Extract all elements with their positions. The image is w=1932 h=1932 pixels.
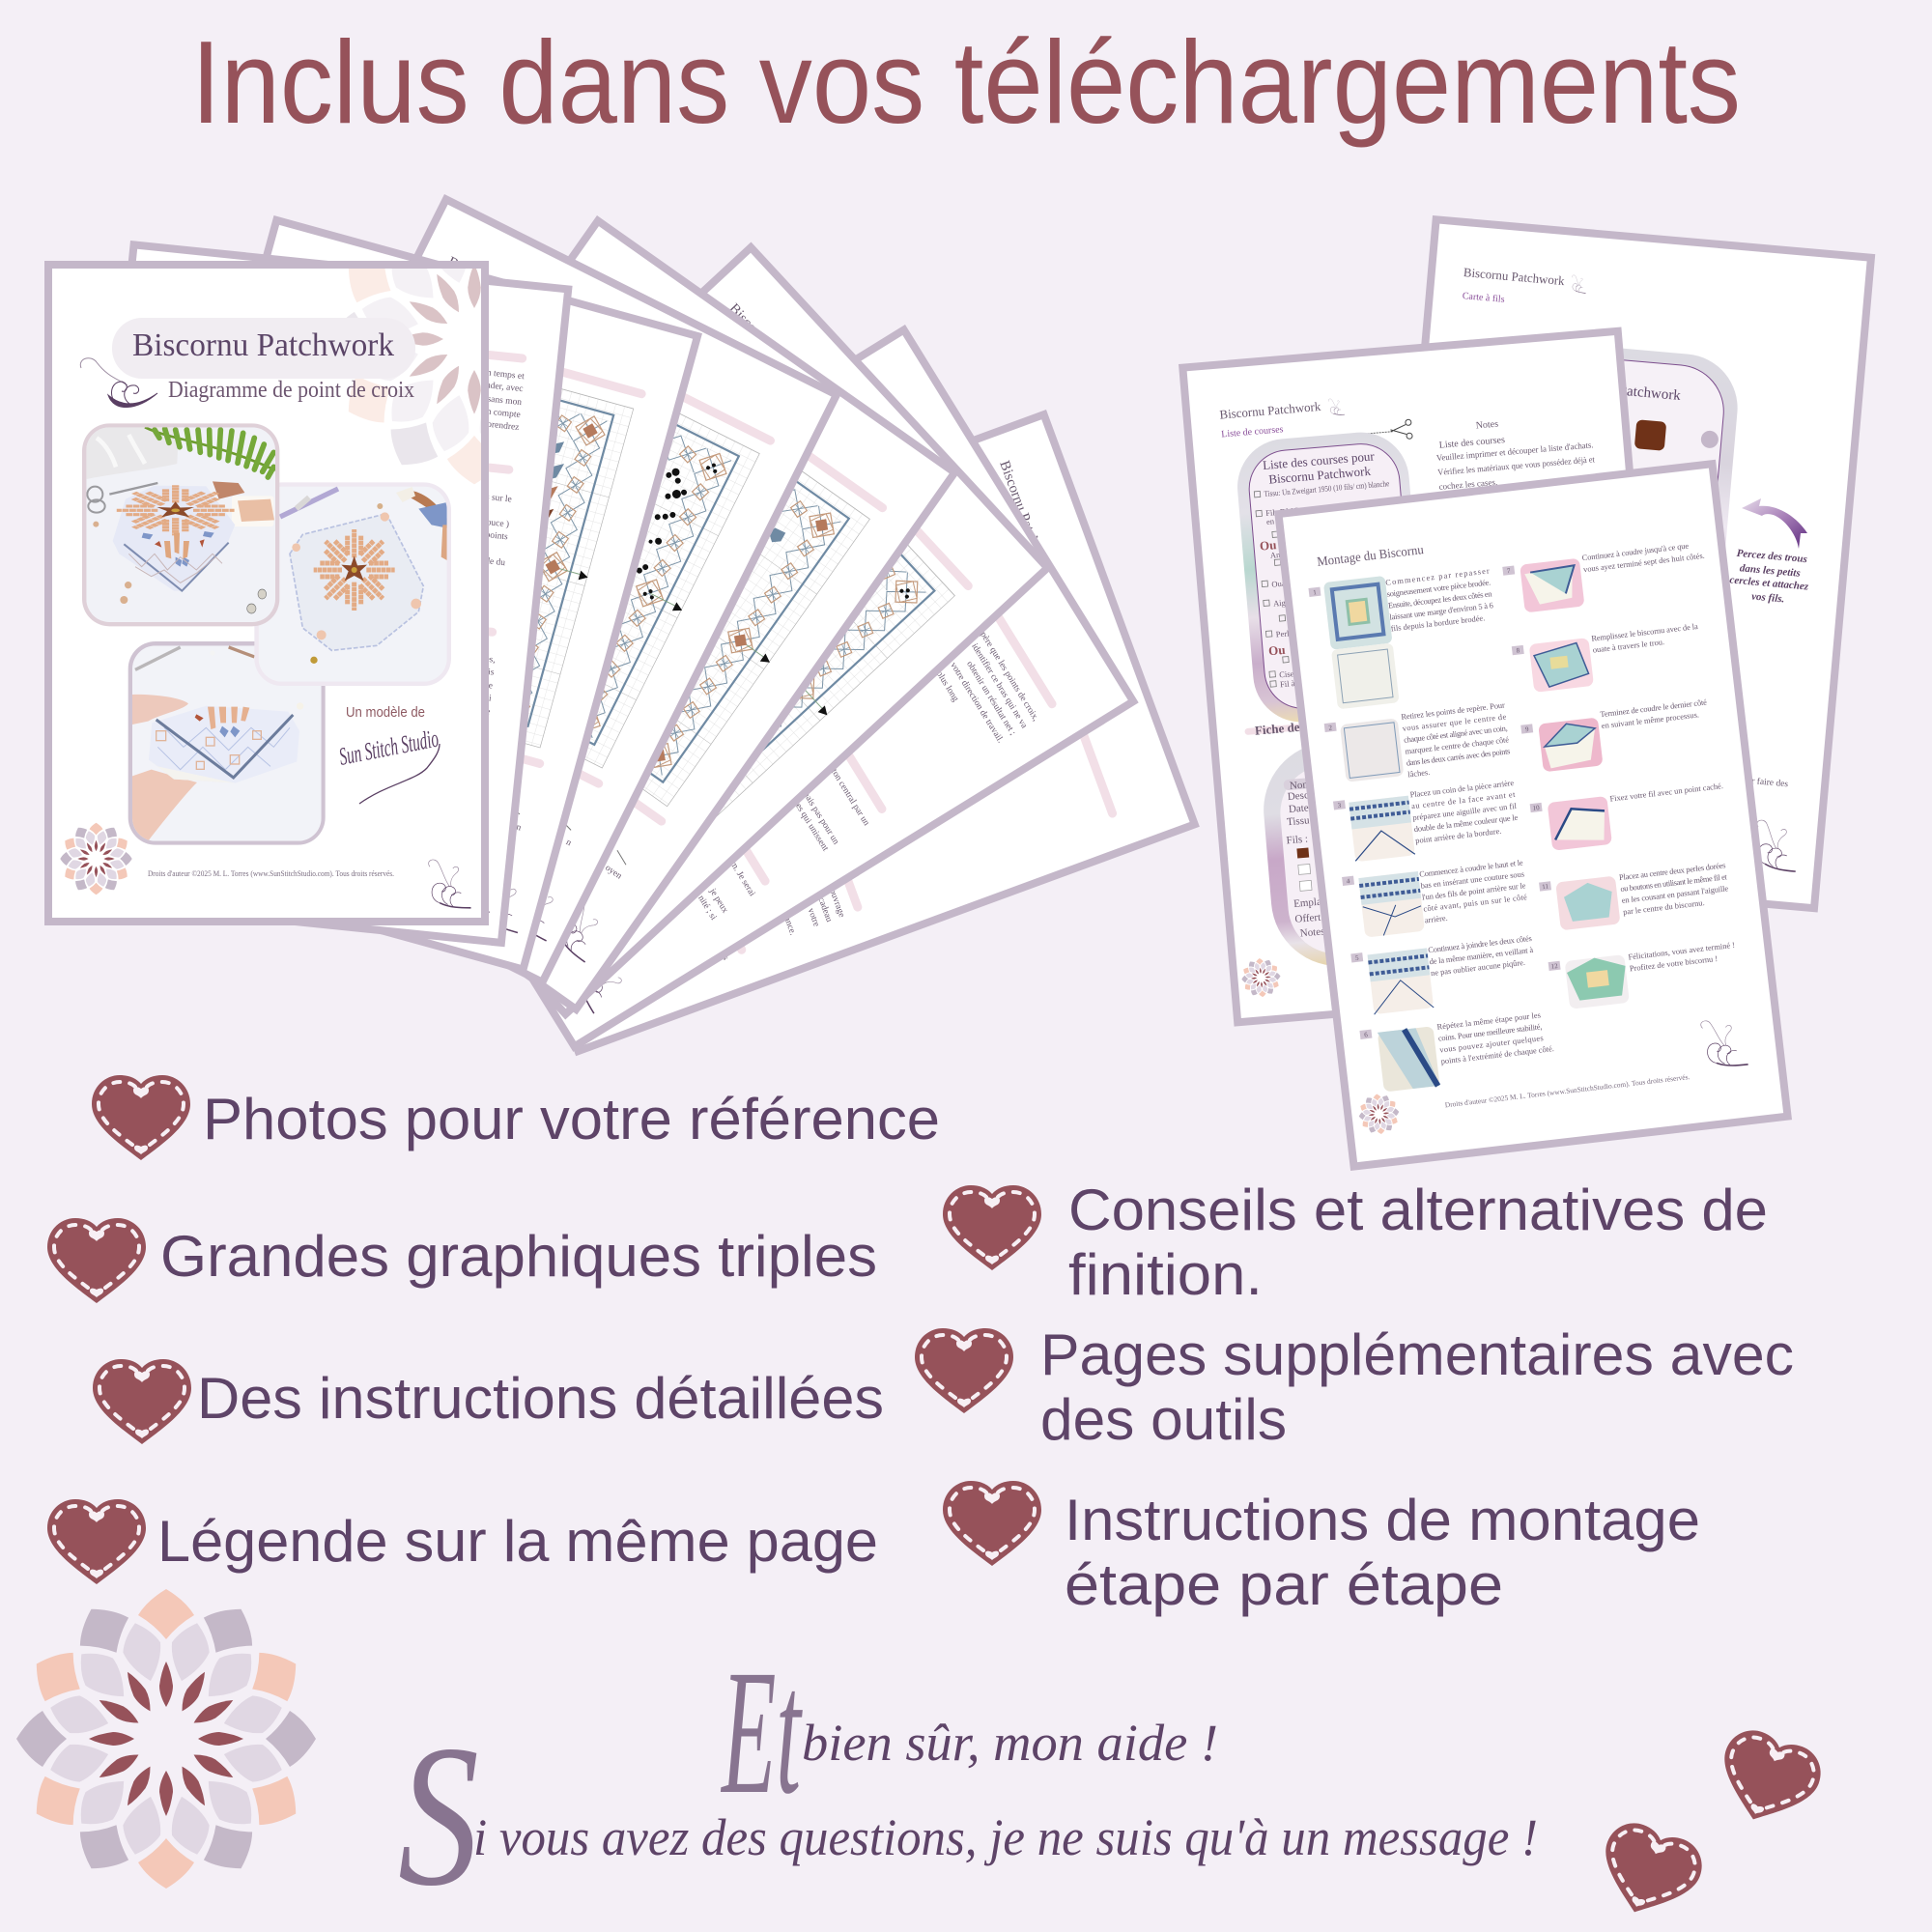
- feature: extra pages: des outils: [1040, 1387, 1287, 1452]
- project sheet panel: Tissu: [1287, 814, 1310, 828]
- page: assembly instructions: 3: [1337, 802, 1342, 810]
- feature: legend: [47, 1499, 878, 1584]
- page sheet 6: père que les points de croix,: [978, 631, 1040, 724]
- page: assembly instructions: 12: [1550, 962, 1559, 971]
- project sheet panel: Date: [1288, 802, 1309, 815]
- page sheet 7: cadeau: [815, 896, 834, 923]
- photo 2: [254, 482, 451, 686]
- page sheet 7: Biscornu Patchwork: [996, 459, 1052, 575]
- photo 3: [128, 641, 326, 845]
- page sheet 6: plus long: [934, 669, 960, 703]
- project sheet panel: Fiche de projet: [1254, 717, 1337, 738]
- instruction text left column: Placez un coin de la pièce arrière: [1409, 779, 1515, 799]
- instruction text right column: en les cousant en passant l'aiguille: [1621, 884, 1729, 905]
- feature: instructions: Des instructions détaillées: [197, 1366, 884, 1431]
- page sheet 1: Biscornu Patchwork: [157, 294, 276, 322]
- page sheet 1: nder, avec: [485, 381, 524, 394]
- instruction text left column: Commencez à coudre le haut et le: [1419, 858, 1523, 879]
- instruction text right column: ouate à travers le trou.: [1592, 638, 1664, 655]
- page sheet 7: [427, 414, 1195, 1051]
- page sheet 6: votre direction de travail.: [948, 661, 1005, 745]
- feature: legend: Légende sur la même page: [157, 1509, 878, 1574]
- page: shopping list: [1182, 331, 1673, 1022]
- instruction text right column: Fixez votre fil avec un point caché.: [1609, 781, 1723, 804]
- list panel: Liste des courses pour: [1262, 448, 1376, 472]
- instruction text left column: coins. Pour une meilleure stabilité,: [1437, 1022, 1543, 1043]
- page sheet 6: ton central par un: [829, 768, 871, 828]
- instruction text left column: au centre de la face avant et: [1411, 790, 1517, 810]
- page sheet 1: re: [485, 681, 493, 692]
- assembly heading: [1316, 512, 1685, 569]
- project sheet panel: Nom: [1289, 779, 1312, 792]
- page: assembly instructions: 1: [1313, 588, 1318, 597]
- instruction text left column: dans les deux carrés avec des points: [1406, 747, 1511, 768]
- page sheet 1: [67, 244, 568, 943]
- notes block: Veuillez imprimer et découper la liste d'achats.: [1436, 440, 1594, 463]
- page sheet 1: prendrez: [487, 420, 520, 433]
- feature: assembly: [943, 1481, 1700, 1617]
- page: shopping list: Biscornu Patchwork: [1219, 399, 1321, 422]
- page sheet 6: obtenir un résultat net ;: [964, 660, 1017, 737]
- large flower: [16, 1589, 316, 1889]
- page sheet 1: ni: [484, 694, 492, 704]
- page sheet 4: [219, 221, 954, 1009]
- page: assembly instructions: 9: [1525, 725, 1529, 733]
- feature: instructions: [93, 1359, 884, 1444]
- small flower logo: [60, 823, 132, 895]
- page sheet 1: de du: [485, 556, 506, 568]
- photo collage: [82, 423, 451, 845]
- instruction text left column: vous pouvez ajouter quelques: [1439, 1034, 1544, 1055]
- page: thread card: Biscornu Patchwork: [1562, 378, 1682, 404]
- page sheet 6: m. Je serai: [728, 860, 757, 898]
- step photos right column: [1519, 558, 1631, 1009]
- instruction text left column: Répétez la même étape pour les: [1436, 1010, 1541, 1032]
- list panel: Fils DMC: [1265, 505, 1299, 518]
- feature: assembly: Instructions de montage: [1065, 1488, 1700, 1552]
- instruction text right column: [1581, 540, 1751, 973]
- page sheet 6: nité ; si: [696, 894, 719, 923]
- page: assembly instructions: 10: [1532, 804, 1541, 812]
- page sheet 4: Biscornu Patchwork: [586, 276, 693, 356]
- page sheet 7: votre: [806, 907, 821, 928]
- instruction text left column: arrière.: [1424, 914, 1448, 924]
- feature: photos: Photos pour votre référence: [203, 1087, 940, 1151]
- un modele de: Un modèle de: [346, 704, 425, 721]
- notes block: Vérifiez les matériaux que vous possédez déjà et: [1437, 454, 1596, 477]
- notes block: Notes: [1475, 419, 1499, 431]
- page sheet 2: en: [511, 821, 523, 834]
- fan of chart pages: [67, 199, 1195, 1051]
- page: assembly instructions: 7: [1507, 567, 1511, 575]
- feature: charts: Grandes graphiques triples: [160, 1224, 877, 1289]
- instruction text left column: de la même manière, en veillant à: [1429, 946, 1534, 966]
- number badges: [1308, 564, 1566, 1039]
- feature: extra pages: [915, 1322, 1794, 1452]
- cover page: [44, 261, 489, 925]
- list panel: Ciseaux: [1279, 668, 1307, 679]
- page sheet 1: n compte: [486, 408, 521, 420]
- list panel: Fil à: [1280, 678, 1295, 689]
- page sheet 2: [102, 220, 697, 970]
- notes block: [1434, 411, 1597, 492]
- list panel: Anchor: [1269, 549, 1295, 560]
- script line 1: [721, 1634, 1218, 1832]
- instruction text left column: Retirez les points de repère. Pour: [1401, 701, 1505, 722]
- notes block: cochez les cases.: [1438, 477, 1497, 492]
- instruction text left column: point arrière de la bordure.: [1415, 827, 1502, 845]
- page sheet 3: n: [564, 838, 573, 848]
- instruction text left column: lâches.: [1407, 768, 1431, 779]
- instruction text right column: Profitez de votre biscornu !: [1629, 954, 1719, 973]
- signature logo: Sun Stitch Studio: [337, 724, 440, 771]
- instruction text right column: vous ayez terminé sept des huit côtés.: [1583, 552, 1705, 574]
- script line 1: Et: [721, 1634, 803, 1832]
- photo 1: [82, 423, 279, 626]
- instruction text right column: Placez au centre deux perles dorées: [1619, 861, 1726, 882]
- project sheet panel: Emplacement: [1293, 894, 1352, 910]
- faded flower decoration: [346, 269, 481, 485]
- feature: photos: [92, 1075, 940, 1160]
- icon: left swirl: [80, 358, 157, 408]
- icon: heart right: [1707, 1722, 1829, 1836]
- instruction text left column: soigneusement votre pièce brodée.: [1386, 578, 1492, 599]
- instruction text right column: Remplissez le biscornu avec de la: [1591, 622, 1698, 643]
- page sheet 6: [345, 330, 1133, 1046]
- arrow note: cercles et attachez: [1729, 574, 1809, 593]
- cover subtitle: Diagramme de point de croix: [168, 378, 414, 403]
- signature logo: [337, 724, 440, 804]
- page: assembly instructions: 11: [1542, 883, 1549, 891]
- arrow: curved purple: [1742, 498, 1807, 549]
- page: thread card: [1379, 219, 1871, 908]
- page sheet 6: rres qui unissent: [790, 797, 830, 853]
- project sheet panel: [1247, 703, 1518, 972]
- instruction text right column: Félicitations, vous avez terminé !: [1628, 941, 1735, 962]
- page sheet 1: pouce ): [481, 517, 510, 529]
- feature: tips: Conseils et alternatives de: [1068, 1178, 1768, 1242]
- title: Inclus dans vos téléchargements: [191, 16, 1741, 148]
- page sheet 1: sans mon: [487, 395, 523, 408]
- step photos left column: [1323, 576, 1444, 1093]
- copyright line: Droits d'auteur ©2025 M. L. Torres (www.SunStitchStudio.com). Tous droits réservés.: [148, 869, 394, 878]
- instruction text right column: Continuez à coudre jusqu'à ce que: [1581, 542, 1690, 562]
- page sheet 1: e: [485, 707, 491, 717]
- list panel: Aiguille: [1273, 596, 1300, 609]
- list panel: Biscornu Patchwork: [1268, 464, 1372, 487]
- instruction text left column: ne pas oublier aucune piqûre.: [1431, 958, 1525, 978]
- arrow note: vos fils.: [1751, 591, 1785, 605]
- page sheet 3: [152, 199, 837, 982]
- page: assembly instructions: 4: [1346, 877, 1350, 886]
- page: assembly instructions: [1278, 464, 1788, 1167]
- instruction text right column: ou boutons en utilisant le même fil et: [1620, 872, 1728, 894]
- page sheet 3: Biscornu Patchwork: [445, 254, 558, 321]
- list panel: Perles: [1275, 628, 1296, 639]
- script line 2: S: [398, 1704, 479, 1928]
- assembly footer: Droits d'auteur ©2025 M. L. Torres (www.SunStitchStudio.com). Tous droits réservés.: [1444, 1072, 1690, 1109]
- page sheet 6: mais pas pour un: [800, 788, 840, 846]
- page sheet 7: s: [720, 954, 730, 962]
- page sheet 5: [269, 247, 1047, 1014]
- page: shopping list: Liste de courses: [1221, 424, 1284, 440]
- list panel: en: [1266, 516, 1275, 526]
- list panel: Ou: [1259, 537, 1277, 554]
- page: assembly instructions: 6: [1364, 1031, 1369, 1038]
- instruction text left column: côté avant, puis un sur le côté: [1423, 893, 1528, 914]
- page sheet 5: Biscornu Patchwork: [725, 301, 817, 398]
- instruction text left column: marquez le centre de chaque côté: [1405, 735, 1510, 756]
- page: assembly instructions: 5: [1355, 954, 1360, 962]
- instruction text right column: par le centre du biscornu.: [1623, 898, 1705, 917]
- list panel: [1234, 429, 1429, 725]
- instruction text left column: double de la même couleur que le: [1413, 813, 1519, 834]
- project sheet panel: Description: [1287, 787, 1338, 803]
- page sheet 6: je peux: [707, 886, 729, 915]
- instruction text left column: Commencez par repasser: [1385, 566, 1490, 587]
- cover title pill: Biscornu Patchwork: [132, 327, 394, 363]
- script line 2: i vous avez des questions, je ne suis qu'à un message !: [473, 1808, 1538, 1866]
- instruction text left column: Ensuite, découpez les deux côtés en: [1388, 589, 1493, 611]
- instruction text left column: fils depuis la bordure brodée.: [1390, 613, 1486, 633]
- arrow note: [1729, 548, 1809, 605]
- instruction text left column: vous assurer que le centre de: [1402, 712, 1507, 733]
- page sheet 1: es,: [485, 655, 496, 666]
- cover title pill: [112, 318, 415, 379]
- instruction text right column: en suivant le même processus.: [1601, 710, 1699, 730]
- page sheet 7: ouvrage: [827, 888, 846, 919]
- page: assembly instructions: 8: [1516, 646, 1520, 655]
- feature: assembly: étape par étape: [1065, 1552, 1503, 1617]
- list panel: Ou: [1268, 642, 1286, 658]
- feature: tips: finition.: [1068, 1242, 1263, 1307]
- list panel: Ouate: [1271, 578, 1292, 589]
- icon: corner swirl: [429, 860, 471, 908]
- instruction text left column: points à l'extrémité de chaque côté.: [1440, 1044, 1554, 1065]
- instruction text left column: Continuez à joindre les deux côtés: [1428, 934, 1532, 954]
- feature: extra pages: Pages supplémentaires avec: [1040, 1322, 1794, 1387]
- instruction text left column: [1385, 565, 1554, 1066]
- page sheet 4: oyen: [603, 864, 623, 882]
- icon: heart left: [1588, 1815, 1710, 1929]
- feature: charts: [47, 1218, 877, 1303]
- arrow note: Percez des trous: [1736, 548, 1807, 565]
- instruction text left column: l'un des fils de point arrière sur le: [1422, 881, 1526, 902]
- project sheet panel: Offert à: [1294, 911, 1328, 925]
- feature: tips: [943, 1178, 1768, 1307]
- page sheet 7: ance.: [781, 916, 797, 937]
- instruction text left column: préparez une aiguille avec un fil: [1412, 802, 1518, 822]
- page: assembly instructions: 2: [1328, 724, 1333, 732]
- instruction text left column: chaque côté est aligné avec un coin,: [1404, 724, 1508, 745]
- instruction text left column: bas en insérant une couture sous: [1420, 869, 1524, 891]
- page: thread card: ur faire des: [1747, 776, 1789, 789]
- assembly heading: Montage du Biscornu: [1316, 542, 1425, 569]
- script line 1: bien sûr, mon aide !: [802, 1714, 1218, 1772]
- page sheet 1: points: [485, 530, 509, 542]
- project sheet panel: Fils :: [1286, 834, 1308, 846]
- page sheet 2: Biscornu Patchwork: [289, 272, 408, 319]
- page sheet 6: identifier ce bras qui ne va: [969, 641, 1030, 731]
- script line 2: [398, 1704, 1538, 1928]
- instruction text left column: laissant une marge d'environ 5 à 6: [1389, 601, 1493, 622]
- list panel: Tissu: Un Zweigart 1950 (10 fils/ cm) blanche: [1264, 478, 1390, 498]
- project sheet panel: Notes: [1299, 925, 1325, 940]
- page sheet 1: s sur le: [485, 493, 512, 505]
- page: thread card: Carte à fils: [1462, 291, 1505, 305]
- page sheet 1: on temps et: [482, 368, 526, 382]
- page sheet 1: is: [488, 668, 495, 678]
- page sheet 6: Biscornu Patchwork: [867, 380, 943, 489]
- arrow note: dans les petits: [1739, 562, 1801, 580]
- notes block: Liste des courses: [1438, 435, 1505, 451]
- page: thread card: Biscornu Patchwork: [1463, 265, 1566, 288]
- instruction text right column: Terminez de coudre le dernier côté: [1600, 697, 1708, 719]
